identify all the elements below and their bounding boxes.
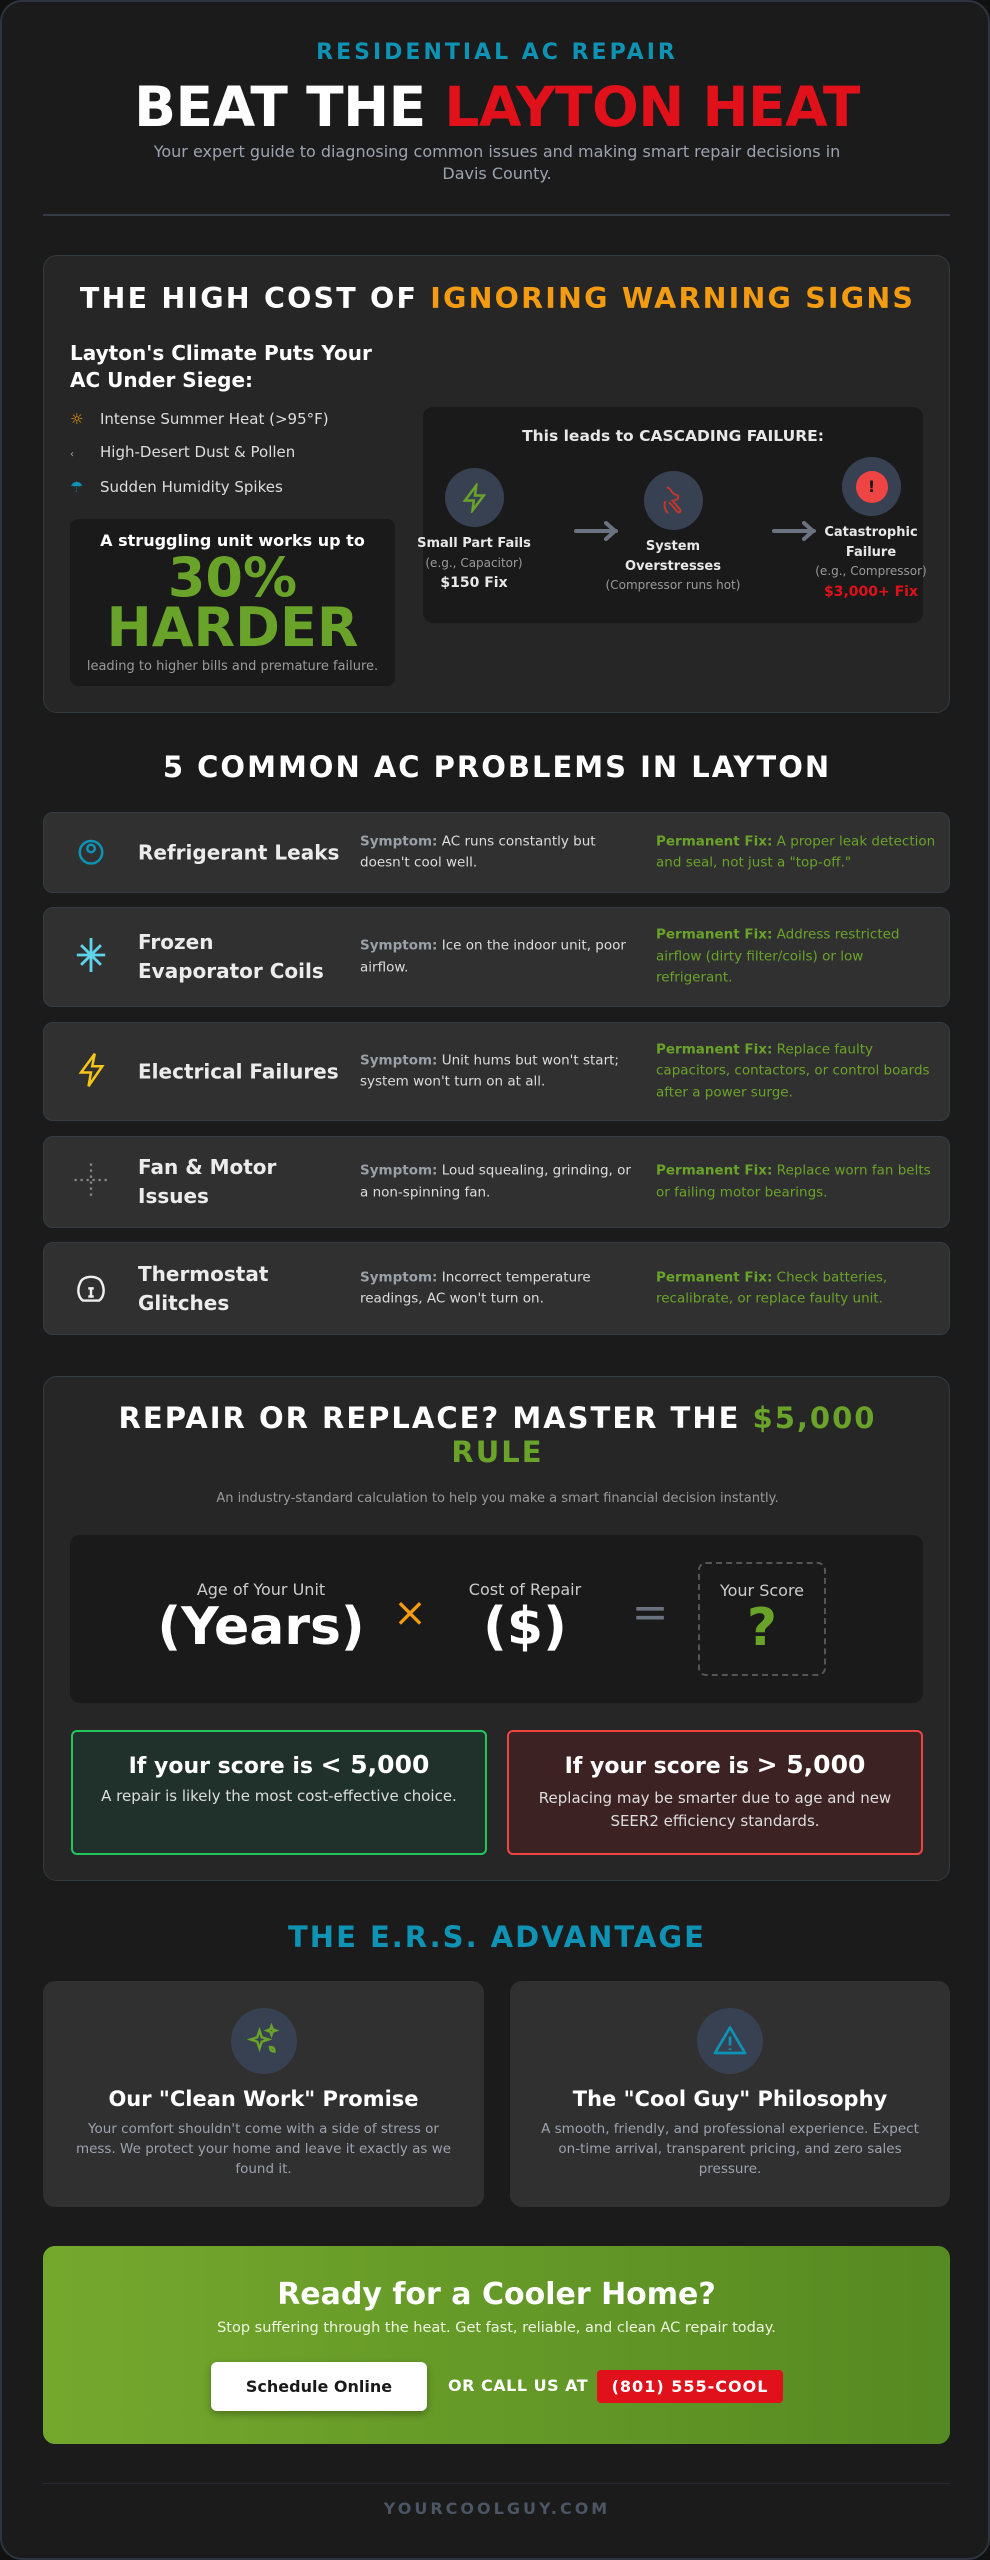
phone badge (597, 2370, 783, 2403)
row: thermostat: Glitches (138, 1290, 229, 1314)
heading: 5000 rule: REPAIR OR REPLACE? MASTER THE $5,000 RULE (119, 1401, 876, 1469)
call label: OR CALL US AT (448, 2376, 588, 2395)
step 3 (815, 525, 927, 600)
verdict: replace (507, 1730, 923, 1855)
stat box: 30% harder: A struggling unit works up to (100, 531, 365, 550)
row: electrical: Symptom: Unit hums but won't start; system won't turn on at all. (360, 1052, 619, 1090)
card: cool guy: A smooth, friendly, and professional experience. Expect on-time arrival, transparent pricing, and zero sales pressure. (541, 2121, 919, 2177)
panel: 5000 rule (43, 1376, 950, 1881)
step 1: Small Part Fails (417, 536, 531, 551)
factor: cost: Cost of Repair (469, 1580, 581, 1599)
score box: ? (747, 1598, 777, 1658)
arrow 1 (574, 520, 618, 542)
heading: high cost: THE HIGH COST OF IGNORING WARNING SIGNS (80, 282, 915, 315)
step 2: Overstresses (625, 558, 721, 574)
icon: alert (842, 457, 901, 516)
heading: common problems: 5 COMMON AC PROBLEMS IN LAYTON (163, 750, 831, 784)
stat box: 30% harder: leading to higher bills and premature failure. (87, 659, 378, 674)
row: electrical (43, 1022, 950, 1121)
CTA title: Ready for a Cooler Home? (277, 2277, 716, 2312)
header label: RESIDENTIAL AC REPAIR (316, 40, 678, 65)
stat box: 30% harder (70, 519, 395, 686)
factor: years: Age of Your Unit (197, 1580, 325, 1599)
icon: overheating (644, 471, 703, 530)
equals sign: = (632, 1587, 668, 1638)
row: frozen coils: Evaporator Coils (138, 959, 324, 983)
factor: years: (Years) (157, 1597, 365, 1657)
row: electrical: Permanent Fix: Replace faulty capacitors, contactors, or control boards after a power surge. (656, 1041, 930, 1100)
formula box (70, 1535, 923, 1703)
icon: warning (697, 2008, 763, 2074)
step 2: System (646, 539, 700, 554)
climate list: High-Desert Dust & Pollen (100, 442, 295, 460)
subtitle: Your expert guide to diagnosing common issues and making smart repair decisions in Davis County. (154, 142, 840, 183)
row: frozen coils: Symptom: Ice on the indoor unit, poor airflow. (360, 937, 626, 975)
stat box: 30% harder: HARDER (107, 596, 358, 659)
row: fan motor: Issues (138, 1184, 209, 1208)
step 2: (Compressor runs hot) (606, 578, 740, 592)
arrow 2 (772, 520, 816, 542)
climate list: ☂ (70, 478, 83, 496)
footer: YOURCOOLGUY.COM (384, 2499, 610, 2518)
phone badge: (801) 555-COOL (612, 2377, 768, 2396)
climate list: Layton's Climate Puts Your AC Under Siege: (70, 341, 372, 392)
row: frozen coils (43, 907, 950, 1007)
icon: fan (74, 1164, 107, 1196)
row: refrigerant leaks: Refrigerant Leaks (138, 840, 339, 864)
icon: bolt (78, 1053, 104, 1087)
icon: alert: ! (868, 476, 875, 496)
icon: thermostat (77, 1276, 105, 1302)
step 1 (417, 536, 531, 591)
row: frozen coils: Frozen (138, 930, 213, 954)
row: refrigerant leaks: Symptom: AC runs constantly but doesn't cool well. (360, 833, 596, 870)
verdict: repair: If your score is < 5,000 (129, 1750, 429, 1779)
cascade title: This leads to CASCADING FAILURE: (522, 427, 824, 445)
factor: cost (469, 1580, 582, 1657)
stat box: 30% harder: 30% (168, 546, 297, 609)
step 3: (e.g., Compressor) (815, 564, 927, 578)
score box (698, 1562, 826, 1676)
step 3: Catastrophic (824, 525, 918, 540)
row: fan motor: Permanent Fix: Replace worn fan belts or failing motor bearings. (656, 1162, 931, 1200)
verdict: repair (71, 1730, 487, 1855)
climate list (70, 341, 372, 496)
climate list: Intense Summer Heat (>95°F) (100, 410, 329, 428)
step 2 (606, 539, 740, 592)
row: electrical: Electrical Failures (138, 1059, 339, 1083)
card: clean work: Our "Clean Work" Promise (108, 2087, 419, 2111)
multiply sign: × (393, 1590, 427, 1636)
row: refrigerant leaks: Permanent Fix: A proper leak detection and seal, not just a "top-off." (656, 833, 935, 870)
row: fan motor: Fan & Motor (138, 1155, 276, 1179)
panel: high cost (43, 255, 950, 713)
row: frozen coils: Permanent Fix: Address restricted airflow (dirty filter/coils) or low refrigerant. (656, 927, 900, 986)
row: thermostat: Permanent Fix: Check batteries, recalibrate, or replace faulty unit. (656, 1269, 887, 1306)
card: clean work: Your comfort shouldn't come with a side of stress or mess. We protect your home and leave it exactly as we found it. (76, 2121, 451, 2177)
verdict: repair: A repair is likely the most cost-effective choice. (101, 1787, 457, 1805)
row: fan motor (43, 1136, 950, 1228)
icon: sparkle (230, 2008, 296, 2074)
verdict: replace: Replacing may be smarter due to age and new SEER2 efficiency standards. (539, 1789, 891, 1830)
score box: Your Score (720, 1581, 804, 1600)
step 1: $150 Fix (440, 575, 508, 591)
icon: snowflake (76, 938, 106, 972)
climate list: ‹ (70, 448, 74, 460)
subtext: An industry-standard calculation to help you make a smart financial decision instantly. (216, 1491, 779, 1506)
row: refrigerant leaks (43, 812, 950, 893)
verdict: replace: If your score is > 5,000 (565, 1750, 865, 1779)
CTA subtext: Stop suffering through the heat. Get fast, reliable, and clean AC repair today. (217, 2320, 776, 2336)
CTA banner (43, 2246, 950, 2444)
title: BEAT THE LAYTON HEAT (134, 75, 860, 139)
step 1: (e.g., Capacitor) (425, 556, 523, 570)
card: cool guy: The "Cool Guy" Philosophy (573, 2087, 887, 2111)
card: cool guy (510, 1981, 950, 2207)
heading: ERS advantage: THE E.R.S. ADVANTAGE (288, 1920, 706, 1954)
step 3: Failure (846, 544, 896, 560)
row: thermostat: Thermostat (138, 1262, 268, 1286)
icon: bolt (445, 468, 504, 527)
row: thermostat: Symptom: Incorrect temperature readings, AC won't turn on. (360, 1269, 591, 1306)
row: fan motor: Symptom: Loud squealing, grinding, or a non-spinning fan. (360, 1162, 631, 1200)
row: thermostat (43, 1242, 950, 1335)
factor: cost: ($) (483, 1597, 567, 1657)
climate list: ☼ (70, 410, 83, 428)
button: schedule (211, 2362, 427, 2411)
step 3: $3,000+ Fix (824, 584, 918, 600)
cascading failure box (423, 407, 923, 623)
climate list: Sudden Humidity Spikes (100, 478, 283, 496)
card: clean work (43, 1981, 484, 2207)
icon: drop (78, 840, 104, 865)
button: schedule: Schedule Online (246, 2377, 392, 2396)
